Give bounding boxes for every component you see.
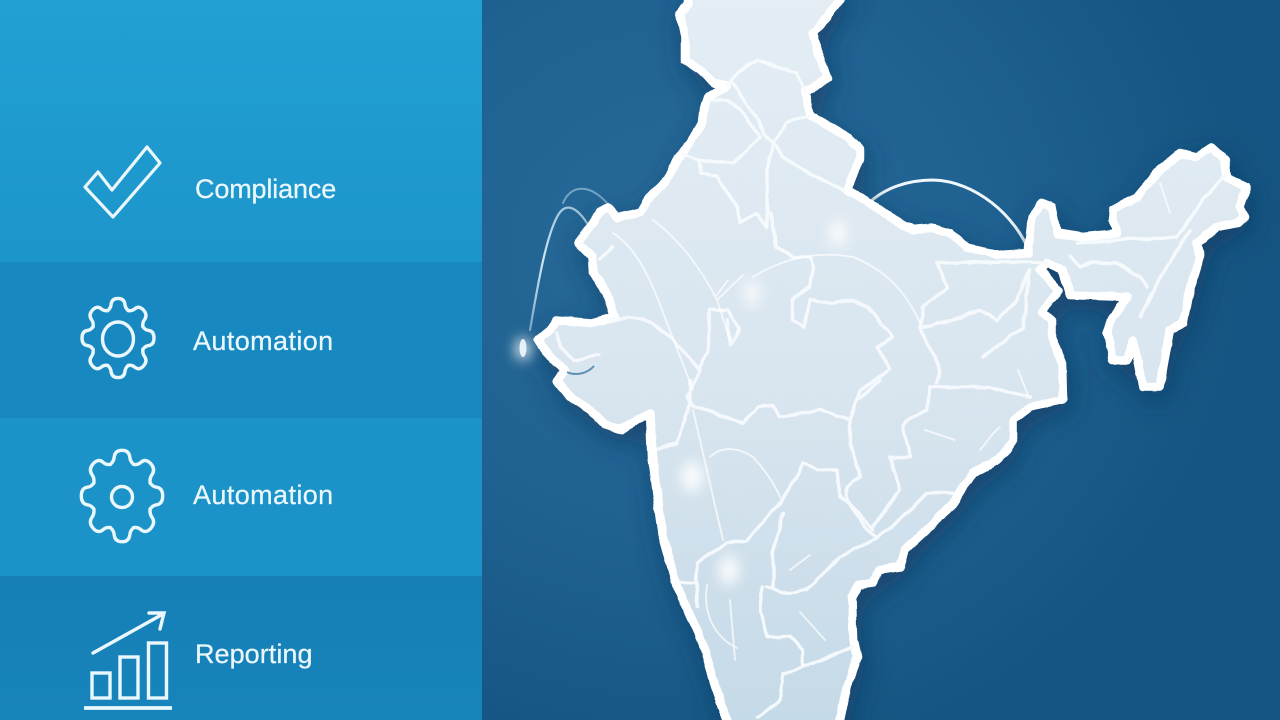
marker: western node xyxy=(520,339,526,357)
label: reporting: Reporting xyxy=(195,639,313,669)
gulf of Kutch notch xyxy=(567,366,594,374)
icon: growth chart xyxy=(84,611,172,710)
icon: check mark xyxy=(83,145,162,219)
label: compliance: Compliance xyxy=(195,174,336,204)
arc: western connection xyxy=(530,189,607,330)
thin interior arcs and rivers xyxy=(613,183,1170,660)
glow points xyxy=(516,219,846,585)
panel: compliance band xyxy=(0,0,482,262)
panel: reporting band xyxy=(0,576,482,720)
icon: gear two xyxy=(80,448,164,544)
label: automation one: Automation xyxy=(193,326,334,356)
arc: northeast connection xyxy=(870,180,1030,253)
label: automation two: Automation xyxy=(193,480,334,510)
state borders xyxy=(557,60,1225,717)
shape: India outline xyxy=(538,0,1247,720)
panel: automation band two xyxy=(0,418,482,576)
icon: gear one xyxy=(80,296,156,380)
panel: map background xyxy=(482,0,1280,720)
panel: sidebar xyxy=(0,0,482,720)
panel: automation band one xyxy=(0,262,482,418)
